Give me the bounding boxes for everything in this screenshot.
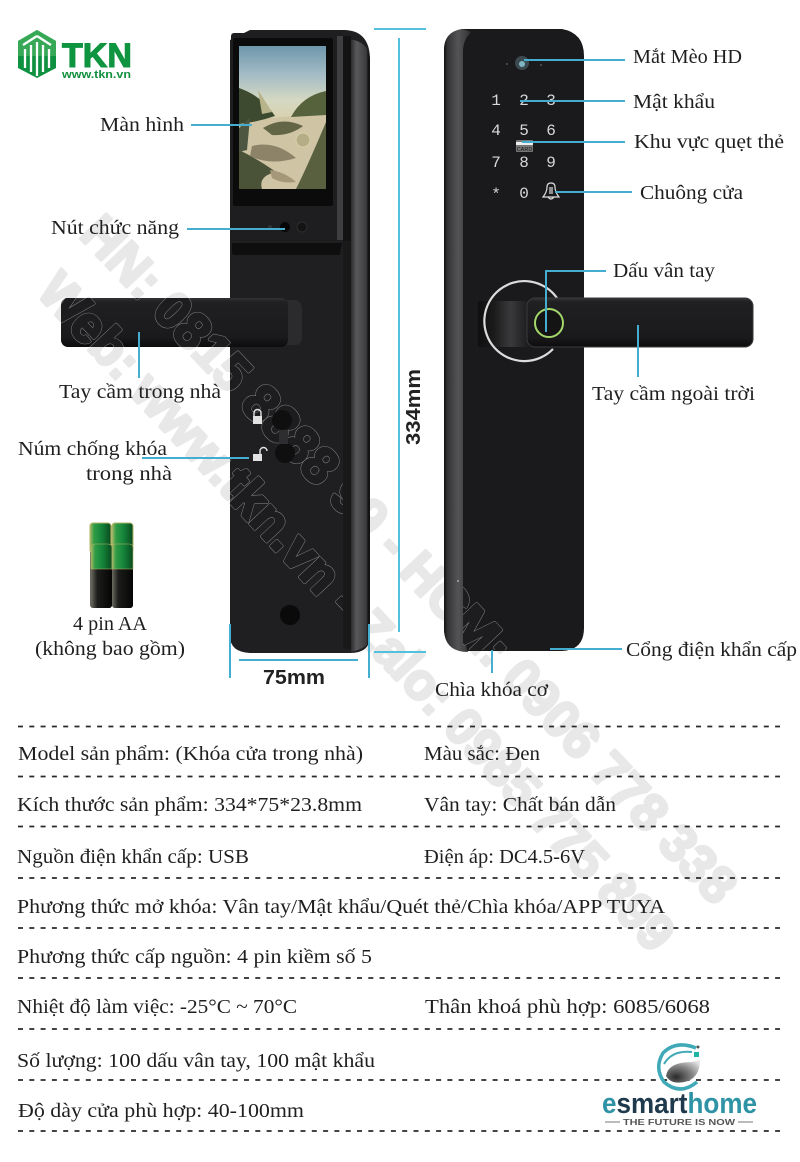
row: model and color: Màu sắc: Đen [424, 743, 540, 765]
keypad: 0 [519, 185, 529, 203]
watermark outline over the product [61, 298, 507, 650]
keypad: 6 [546, 122, 556, 140]
label: 4 pin AA: 4 pin AA [73, 613, 148, 635]
dimension: height 334mm: 334mm [403, 369, 425, 445]
label: Mắt Mèo HD: Mắt Mèo HD [633, 46, 742, 68]
keypad [491, 92, 559, 204]
specification table [17, 743, 710, 1122]
left lock: indoor panel [230, 30, 370, 653]
right handle [527, 298, 753, 347]
keypad: 1 [491, 92, 501, 110]
screen image [239, 46, 326, 189]
keypad: 8 [519, 154, 529, 172]
label: Núm chống khóa trong nhà [18, 438, 249, 485]
dimension: height 334mm [374, 29, 426, 652]
dimension: width 75mm [230, 624, 369, 689]
label: Dấu vân tay: Dấu vân tay [613, 260, 715, 282]
row: unlock methods: Phương thức mở khóa: Vân tay/Mật khẩu/Quét thẻ/Chìa khóa/APP TUYA [17, 896, 666, 918]
lever neck [478, 301, 532, 347]
fingerprint sensor [535, 309, 563, 337]
label: 4 pin AA [35, 613, 185, 660]
row: capacity: Số lượng: 100 dấu vân tay, 100 mật khẩu [17, 1050, 375, 1072]
row: temperature and lock body: Thân khoá phù hợp: 6085/6068 [425, 996, 710, 1018]
icon: 4 AA batteries [90, 523, 133, 608]
screen housing [231, 33, 351, 255]
keypad: CARD [517, 147, 532, 153]
watermark outline over the product: HN: 0815 8888 99 - HCM: 0906 778 338 [69, 204, 748, 915]
left handle [61, 298, 302, 347]
keypad: 9 [546, 154, 556, 172]
label: Khu vực quẹt thẻ: Khu vực quẹt thẻ [634, 131, 784, 153]
row: temperature and lock body [17, 996, 710, 1018]
logo: esmarthome: esmarthome [602, 1088, 757, 1120]
label: Núm chống khóa trong nhà: Núm chống khóa [18, 438, 167, 460]
dimension: width 75mm: 75mm [263, 667, 325, 689]
label: Dấu vân tay [546, 260, 715, 332]
keypad: 3 [546, 92, 556, 110]
label: Nút chức năng: Nút chức năng [51, 217, 179, 239]
logo: esmarthome: THE FUTURE IS NOW [623, 1118, 736, 1127]
watermark outline over the product: Web: www.tkn.vn - Zalo: 0985 775 899 [26, 262, 686, 963]
row: size and fingerprint: Kích thước sản phẩm: 334*75*23.8mm [17, 794, 362, 816]
label: Tay cầm trong nhà: Tay cầm trong nhà [59, 381, 221, 403]
label: Núm chống khóa trong nhà: trong nhà [86, 463, 172, 485]
logo: TKN: TKN [62, 37, 132, 75]
row: emergency power and voltage: Nguồn điện khẩn cấp: USB [17, 846, 249, 868]
keypad: * [491, 186, 501, 204]
row: size and fingerprint: Vân tay: Chất bán dẫn [424, 794, 616, 816]
row: model and color [18, 743, 540, 765]
row: power supply: Phương thức cấp nguồn: 4 pin kiềm số 5 [17, 946, 372, 968]
keypad: 4 [491, 122, 501, 140]
keypad: 2 [519, 92, 529, 110]
label: 4 pin AA: (không bao gồm) [35, 638, 185, 660]
keypad: 5 [519, 122, 529, 140]
watermark: phone numbers and website: HN: 0815 8888 99 - HCM: 0906 778 338 [69, 204, 748, 915]
row: model and color: Model sản phẩm: (Khóa cửa trong nhà) [18, 743, 363, 765]
anti-lock knob [253, 410, 295, 463]
row: emergency power and voltage: Điện áp: DC4.5-6V [424, 846, 586, 868]
row: door thickness: Độ dày cửa phù hợp: 40-100mm [18, 1100, 304, 1122]
label: Cổng điện khẩn cấp: Cổng điện khẩn cấp [626, 639, 797, 661]
watermark: phone numbers and website: Web: www.tkn.vn - Zalo: 0985 775 899 [26, 262, 686, 963]
label: Chuông cửa: Chuông cửa [640, 182, 743, 204]
row: temperature and lock body: Nhiệt độ làm việc: -25°C ~ 70°C [17, 996, 297, 1018]
watermark outline over the product: Web: www.tkn.vn - Zalo: 0985 775 899 [26, 262, 686, 963]
rosette ring [484, 281, 557, 361]
logo: TKN [18, 30, 132, 81]
label: Mật khẩu: Mật khẩu [633, 91, 715, 113]
watermark outline over the product: HN: 0815 8888 99 - HCM: 0906 778 338 [69, 204, 748, 915]
camera [506, 56, 542, 70]
keypad: 7 [491, 154, 501, 172]
label: Tay cầm ngoài trời: Tay cầm ngoài trời [592, 383, 755, 405]
key cover [280, 605, 300, 625]
label: Màn hình: Màn hình [100, 114, 184, 136]
label: Chìa khóa cơ [435, 650, 548, 701]
logo: esmarthome [600, 1045, 765, 1128]
row: emergency power and voltage [17, 846, 586, 868]
row: size and fingerprint [17, 794, 616, 816]
logo: TKN: www.tkn.vn [61, 69, 131, 81]
label: Chìa khóa cơ: Chìa khóa cơ [435, 679, 548, 701]
right lock: outdoor panel [444, 29, 584, 652]
